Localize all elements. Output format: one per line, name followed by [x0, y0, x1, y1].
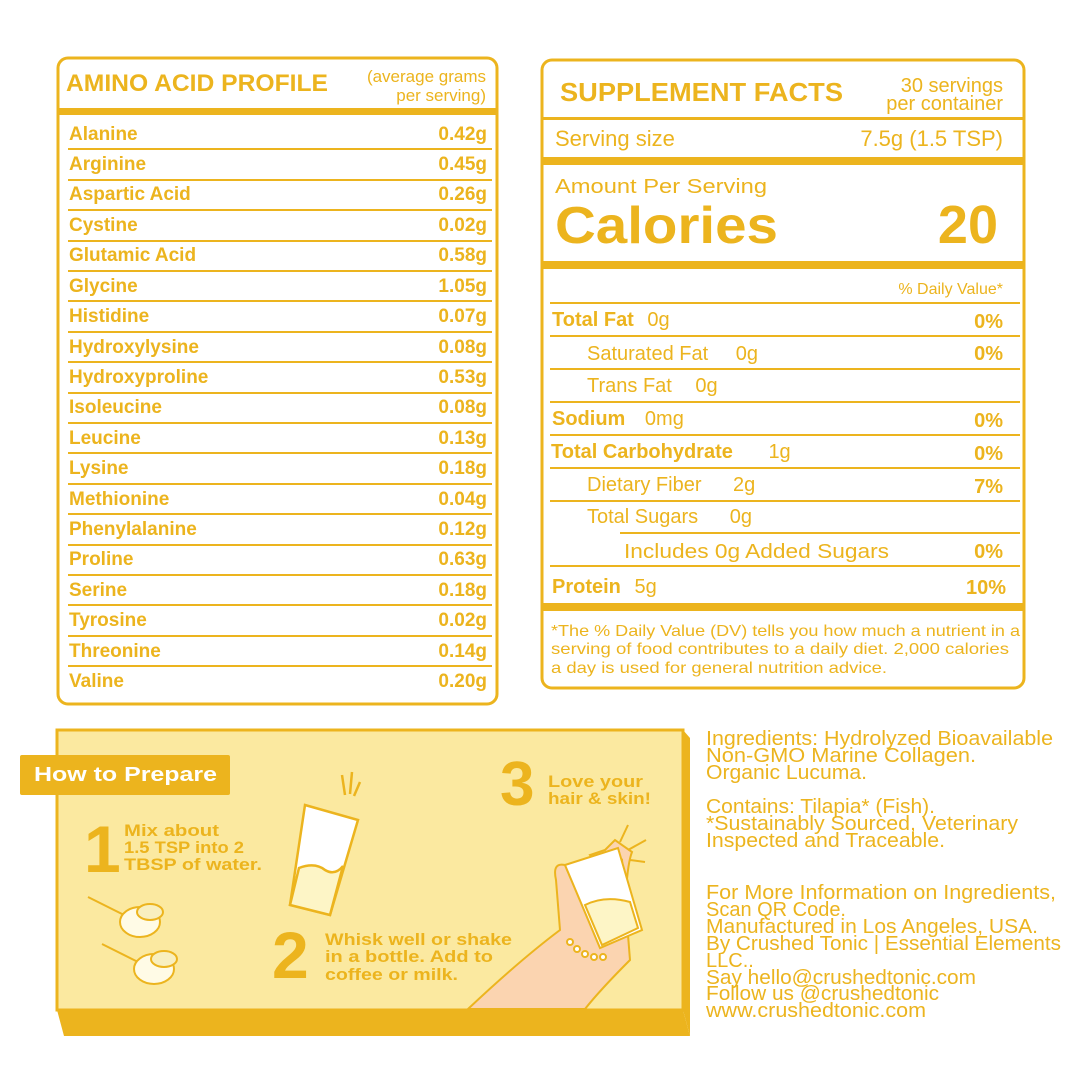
amino acid rows: 0.63g	[438, 549, 487, 570]
amino acid rows: 0.02g	[438, 610, 487, 631]
panel: supplement facts: 7.5g (1.5 TSP)	[860, 126, 1003, 151]
amino acid rows: Glutamic Acid	[69, 245, 196, 266]
step 3	[500, 750, 651, 819]
amino acid rows: Histidine	[69, 306, 149, 327]
amino acid rows: Tyrosine	[69, 610, 147, 631]
amino acid rows: Proline	[69, 549, 133, 570]
amino acid rows: Hydroxylysine	[69, 337, 199, 358]
amino acid rows: 0.13g	[438, 428, 487, 449]
amino acid rows: 0.45g	[438, 154, 487, 175]
text block: ingredients and info: www.crushedtonic.com	[705, 1000, 926, 1022]
step 2: 2	[272, 918, 309, 992]
amino acid rows: Aspartic Acid	[69, 184, 191, 205]
step 1: Mix about	[124, 821, 219, 840]
amino acid rows: 0.14g	[438, 641, 487, 662]
icon: hand holding glass	[468, 825, 646, 1009]
footnote: serving of food contributes to a daily diet. 2,000 calories	[551, 641, 1009, 658]
step 3: 3	[500, 750, 534, 819]
amino acid rows: Methionine	[69, 489, 169, 510]
amino acid rows: 0.07g	[438, 306, 487, 327]
amino acid rows: Valine	[69, 671, 124, 692]
amino acid rows: Hydroxyproline	[69, 367, 208, 388]
nutrient rows: Sodium 0mg	[552, 408, 684, 430]
text block: ingredients and info: Inspected and Traceable.	[706, 830, 945, 852]
amino acid rows: Serine	[69, 580, 127, 601]
amino acid rows: 0.04g	[438, 489, 487, 510]
amino acid rows: Phenylalanine	[69, 519, 197, 540]
amino acid rows: 0.18g	[438, 458, 487, 479]
panel: amino acid profile: per serving)	[396, 86, 486, 105]
step 1: 1.5 TSP into 2	[124, 838, 244, 857]
nutrient rows: Trans Fat 0g	[587, 375, 718, 397]
nutrient rows: Dietary Fiber 2g	[587, 474, 755, 496]
nutrient rows	[550, 309, 1020, 599]
amino acid rows: 0.53g	[438, 367, 487, 388]
text block: ingredients and info: Organic Lucuma.	[706, 762, 867, 784]
nutrient rows: Saturated Fat 0g	[587, 343, 758, 365]
amino acid rows	[68, 124, 492, 692]
panel: how to prepare	[20, 730, 690, 1036]
amino acid rows: 1.05g	[438, 276, 487, 297]
step 3: Love your	[548, 772, 643, 791]
nutrient rows: Total Sugars 0g	[587, 506, 752, 528]
amino acid rows: 0.08g	[438, 397, 487, 418]
panel: supplement facts: 30 servings	[901, 75, 1003, 97]
text block: ingredients and info: Non-GMO Marine Collagen.	[706, 745, 976, 767]
amino acid rows: 0.42g	[438, 124, 487, 145]
heading: amino acid profile: AMINO ACID PROFILE	[66, 70, 328, 97]
step 2	[272, 918, 512, 992]
step 1	[84, 812, 262, 886]
nutrient rows: 0%	[974, 343, 1003, 365]
icon: scoops	[88, 897, 177, 984]
footnote: *The % Daily Value (DV) tells you how much a nutrient in a	[551, 623, 1020, 640]
text block: ingredients and info: *Sustainably Sourced, Veterinary	[706, 813, 1018, 835]
label: how to prepare	[20, 755, 230, 795]
nutrient rows: 0%	[974, 443, 1003, 465]
panel: amino acid profile	[58, 58, 497, 704]
amino acid rows: Leucine	[69, 428, 141, 449]
text block: ingredients and info: Contains: Tilapia* (Fish).	[706, 796, 935, 818]
text block: ingredients and info: Ingredients: Hydrolyzed Bioavailable	[706, 728, 1053, 750]
nutrient rows: Total Fat 0g	[552, 309, 670, 331]
amino acid rows: 0.26g	[438, 184, 487, 205]
amino acid rows: 0.18g	[438, 580, 487, 601]
amino acid rows: Cystine	[69, 215, 138, 236]
amino acid rows: 0.58g	[438, 245, 487, 266]
step 1: 1	[84, 812, 121, 886]
amino acid rows: 0.02g	[438, 215, 487, 236]
calories: Amount Per Serving	[555, 176, 767, 198]
amino acid rows: Threonine	[69, 641, 161, 662]
amino acid rows: Glycine	[69, 276, 138, 297]
nutrient rows: 10%	[966, 577, 1006, 599]
footnote	[551, 623, 1020, 677]
text block: ingredients and info: Manufactured in Los Angeles, USA.	[706, 916, 1038, 938]
footnote: a day is used for general nutrition advice.	[551, 660, 887, 677]
step 2: coffee or milk.	[325, 965, 458, 984]
amino acid rows: 0.20g	[438, 671, 487, 692]
step 3: hair & skin!	[548, 789, 651, 808]
step 1: TBSP of water.	[124, 855, 262, 874]
step 2: Whisk well or shake	[325, 930, 512, 949]
text block: ingredients and info	[705, 728, 1061, 1022]
subheading: average grams: (average grams	[367, 67, 486, 86]
panel: supplement facts	[542, 60, 1024, 688]
text block: ingredients and info: For More Information on Ingredients,	[706, 882, 1056, 904]
amino acid rows: 0.08g	[438, 337, 487, 358]
nutrient rows: 0%	[974, 410, 1003, 432]
amino acid rows: Alanine	[69, 124, 138, 145]
nutrient rows: 0%	[974, 541, 1003, 563]
text block: ingredients and info: Say hello@crushedtonic.com	[706, 967, 976, 989]
panel: supplement facts: Calories	[555, 197, 778, 255]
amino acid rows: Isoleucine	[69, 397, 162, 418]
label: how to prepare: How to Prepare	[34, 764, 217, 786]
nutrient rows: Total Carbohydrate 1g	[551, 441, 791, 463]
amino acid rows: 0.12g	[438, 519, 487, 540]
serving size: Serving size	[555, 126, 675, 151]
step 2: in a bottle. Add to	[325, 947, 493, 966]
nutrient rows: Includes 0g Added Sugars	[624, 541, 889, 563]
nutrient rows: 7%	[974, 476, 1003, 498]
text block: ingredients and info: Follow us @crushedtonic	[706, 983, 939, 1005]
text block: ingredients and info: Scan QR Code.	[706, 899, 846, 921]
nutrient rows: 0%	[974, 311, 1003, 333]
panel: supplement facts: 20	[938, 195, 998, 255]
amino acid rows: Lysine	[69, 458, 128, 479]
text block: ingredients and info: LLC..	[706, 950, 754, 972]
nutrient rows: Protein 5g	[552, 576, 657, 598]
icon: glass	[290, 772, 360, 915]
text block: ingredients and info: By Crushed Tonic | Essential Elements	[706, 933, 1061, 955]
amino acid rows: Arginine	[69, 154, 146, 175]
panel: supplement facts: per container	[886, 93, 1003, 115]
panel: supplement facts: % Daily Value*	[898, 281, 1003, 298]
heading: supplement facts: SUPPLEMENT FACTS	[560, 77, 843, 107]
